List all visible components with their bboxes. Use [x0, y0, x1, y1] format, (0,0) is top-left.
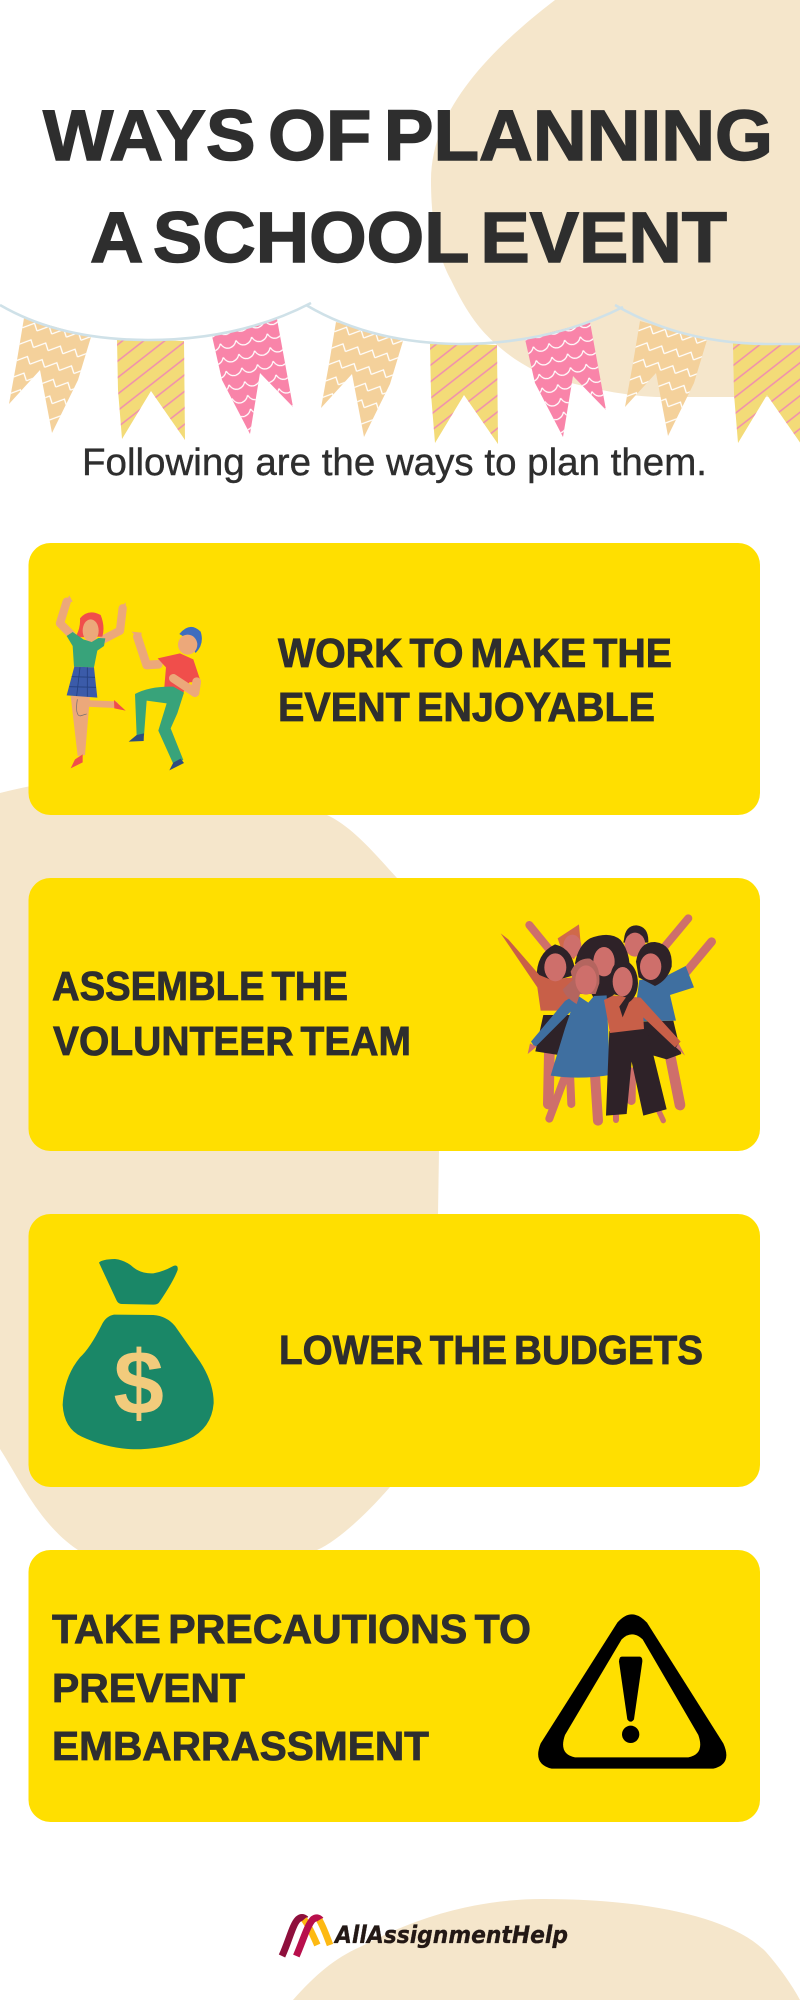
flag: stripes 2 — [117, 339, 185, 440]
background blob: left middle — [0, 776, 439, 1576]
title — [43, 97, 773, 278]
dollar sign: $ — [113, 1333, 164, 1434]
card panel — [28, 878, 760, 1151]
card heading: PREVENT — [52, 1665, 245, 1711]
card panel — [28, 1214, 760, 1487]
card heading: ASSEMBLE THE — [52, 963, 348, 1009]
logo: AllAssignmentHelp — [282, 1918, 568, 1956]
flag: stripes 5 — [430, 343, 498, 444]
card 2: volunteer team — [28, 878, 760, 1151]
card heading: EMBARRASSMENT — [52, 1723, 429, 1769]
flag: scallops 3 — [212, 319, 293, 434]
card heading — [52, 963, 411, 1064]
card 4: precautions — [28, 1550, 760, 1822]
card heading — [278, 630, 672, 730]
flag: scallops 6 — [525, 322, 606, 437]
card heading: TAKE PRECAUTIONS TO — [52, 1606, 531, 1652]
flag: stripes 8 — [733, 343, 800, 444]
string — [0, 303, 800, 344]
flag: chevron 1 — [9, 318, 91, 433]
logo mark — [282, 1918, 330, 1956]
logo wordmark: AllAssignmentHelp — [333, 1921, 568, 1949]
card heading: LOWER THE BUDGETS — [279, 1327, 703, 1373]
subtitle: Following are the ways to plan them. — [82, 442, 707, 484]
icon: dancing couple — [60, 595, 202, 770]
card heading: VOLUNTEER TEAM — [53, 1018, 411, 1064]
card 3: budgets — [28, 1214, 760, 1487]
title: WAYS OF PLANNING — [43, 97, 773, 176]
bunting garland — [0, 303, 800, 444]
card heading: WORK TO MAKE THE — [278, 630, 672, 676]
card 1: enjoyable — [28, 543, 760, 815]
flag: chevron 4 — [321, 322, 403, 437]
icon: group of volunteers — [501, 918, 712, 1121]
card panel — [28, 1550, 760, 1822]
title: A SCHOOL EVENT — [90, 199, 727, 278]
icon: warning triangle — [538, 1614, 726, 1769]
background blob: bottom right — [293, 1899, 800, 2000]
card panel — [28, 543, 760, 815]
background blob: top right — [431, 0, 800, 397]
icon: money bag — [63, 1259, 214, 1449]
card heading — [52, 1606, 531, 1769]
card heading: EVENT ENJOYABLE — [278, 684, 655, 730]
flag: chevron 7 — [625, 321, 707, 436]
